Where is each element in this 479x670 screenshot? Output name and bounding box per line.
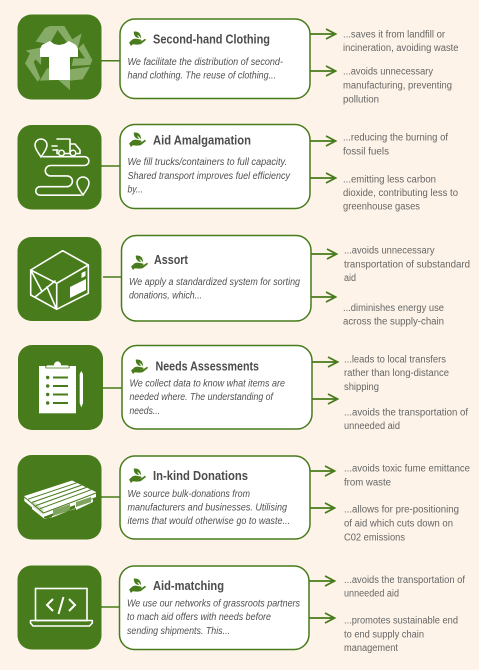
card: aid amalgamation xyxy=(120,124,310,208)
outcome 2: ...avoids unnecessary xyxy=(343,66,433,78)
description xyxy=(129,277,300,302)
icon: truck on route xyxy=(18,125,102,210)
description: donations, which... xyxy=(129,290,202,302)
connector xyxy=(101,60,120,62)
outcome 2: management xyxy=(344,643,398,654)
card: aid-matching xyxy=(120,566,309,650)
outcome 2: to end supply chain xyxy=(344,630,424,640)
description: We collect data to know what items are xyxy=(130,378,285,390)
outcome 2 xyxy=(343,174,458,212)
outcome 1: fossil fuels xyxy=(343,146,389,158)
outcome 2: ...allows for pre-positioning xyxy=(344,504,459,516)
outcome 2: ...diminishes energy use xyxy=(343,303,444,314)
outcome 1 xyxy=(344,246,470,284)
outcome 1: transportation of substandard xyxy=(344,260,470,270)
description: needs... xyxy=(130,406,160,417)
description: sending shipments. This... xyxy=(127,626,230,637)
outcome 1 xyxy=(344,575,465,600)
icon: leaf in hand xyxy=(129,133,146,147)
outcome 1: ...reducing the burning of xyxy=(343,132,448,144)
outcome 2: greenhouse gases xyxy=(343,202,420,212)
outcome 2 xyxy=(344,408,468,432)
arrow 2 xyxy=(310,66,336,76)
description xyxy=(128,489,290,527)
heading: Assort xyxy=(154,253,189,267)
connector xyxy=(101,606,120,608)
heading: In-kind Donations xyxy=(153,469,248,483)
outcome 2 xyxy=(344,616,458,654)
heading: Needs Assessments xyxy=(156,360,259,374)
description: items that would otherwise go to waste... xyxy=(128,516,290,527)
card: needs assessments xyxy=(122,346,312,429)
outcome 1 xyxy=(344,354,449,393)
row: aid amalgamation xyxy=(18,124,458,212)
connector xyxy=(101,496,120,498)
arrow 1 xyxy=(312,357,338,367)
description xyxy=(128,57,284,82)
arrow 2 xyxy=(309,613,334,623)
description: hand clothing. The reuse of clothing... xyxy=(128,70,276,82)
outcome 1: ...avoids the transportation of xyxy=(344,575,465,586)
outcome 2: ...avoids the transportation of xyxy=(344,408,468,418)
arrow 1 xyxy=(310,136,336,146)
description: to mach aid offers with needs before xyxy=(127,612,271,623)
outcome 1: ...saves it from landfill or xyxy=(343,30,446,40)
icon: parcel box xyxy=(18,237,102,321)
row: in-kind donations xyxy=(18,455,470,544)
connector xyxy=(103,276,122,278)
outcome 1: ...leads to local transfers xyxy=(344,354,446,366)
outcome 2: C02 emissions xyxy=(344,532,405,544)
row: second-hand clothing xyxy=(18,14,459,106)
description: needed where. The understanding of xyxy=(130,392,274,403)
arrow 1 xyxy=(310,29,336,39)
outcome 1: from waste xyxy=(344,478,391,488)
outcome 1: ...avoids toxic fume emittance xyxy=(344,464,470,474)
outcome 2 xyxy=(343,303,444,328)
arrow 2 xyxy=(311,292,336,302)
arrow 1 xyxy=(310,466,334,476)
icon: laptop with code xyxy=(18,566,102,650)
outcome 2: pollution xyxy=(343,94,379,106)
connector xyxy=(103,387,122,389)
outcome 2: ...emitting less carbon xyxy=(343,174,436,186)
outcome 2: across the supply-chain xyxy=(343,316,444,328)
row: aid-matching xyxy=(18,566,465,654)
arrow 2 xyxy=(310,173,336,183)
card: second-hand clothing xyxy=(120,19,310,98)
description: Shared transport improves fuel efficiency xyxy=(128,171,291,182)
icon: leaf in hand xyxy=(129,579,146,593)
description: manufacturers and businesses. Utilising xyxy=(128,502,287,514)
description: We use our networks of grassroots partners xyxy=(127,598,300,610)
icon: clipboard and pencil xyxy=(18,345,103,430)
description: We source bulk-donations from xyxy=(128,489,250,500)
outcome 1 xyxy=(343,30,459,54)
outcome 2: dioxide, contributing less to xyxy=(343,188,458,199)
icon: recycled t-shirt xyxy=(18,14,102,100)
outcome 1: aid xyxy=(344,273,356,284)
heading: Aid Amalgamation xyxy=(153,134,251,148)
card: assort xyxy=(122,236,311,321)
description xyxy=(128,157,291,196)
arrow 1 xyxy=(311,249,336,259)
outcome 2: of aid which cuts down on xyxy=(344,518,453,530)
outcome 2 xyxy=(344,504,459,544)
row: assort xyxy=(18,236,470,328)
outcome 1 xyxy=(344,464,470,488)
outcome 1: shipping xyxy=(344,382,379,393)
heading: Aid-matching xyxy=(153,579,224,593)
icon: leaf in hand xyxy=(131,256,148,270)
description: by... xyxy=(128,184,143,196)
row: needs assessments xyxy=(18,345,468,432)
card: in-kind donations xyxy=(120,456,310,539)
outcome 1: ...avoids unnecessary xyxy=(344,246,434,256)
icon: leaf in hand xyxy=(131,360,148,374)
arrow 1 xyxy=(309,576,334,586)
description xyxy=(127,598,300,637)
outcome 1: incineration, avoiding waste xyxy=(343,43,459,54)
outcome 2: ...promotes sustainable end xyxy=(344,616,458,626)
outcome 1 xyxy=(343,132,448,158)
icon: leaf in hand xyxy=(129,32,146,46)
description: We facilitate the distribution of second- xyxy=(128,57,284,68)
description: We fill trucks/containers to full capacity. xyxy=(128,157,287,168)
icon: leaf in hand xyxy=(129,469,146,483)
outcome 2 xyxy=(343,66,452,106)
connector xyxy=(101,165,120,167)
outcome 1: unneeded aid xyxy=(344,588,399,600)
icon: pallet xyxy=(18,455,102,540)
outcome 2: manufacturing, preventing xyxy=(343,80,452,92)
description xyxy=(130,378,285,417)
heading: Second-hand Clothing xyxy=(153,32,270,46)
outcome 1: rather than long-distance xyxy=(344,368,449,379)
outcome 2: unneeded aid xyxy=(344,421,400,432)
description: We apply a standardized system for sorting xyxy=(129,277,300,288)
arrow 2 xyxy=(312,394,338,404)
arrow 2 xyxy=(310,503,334,513)
